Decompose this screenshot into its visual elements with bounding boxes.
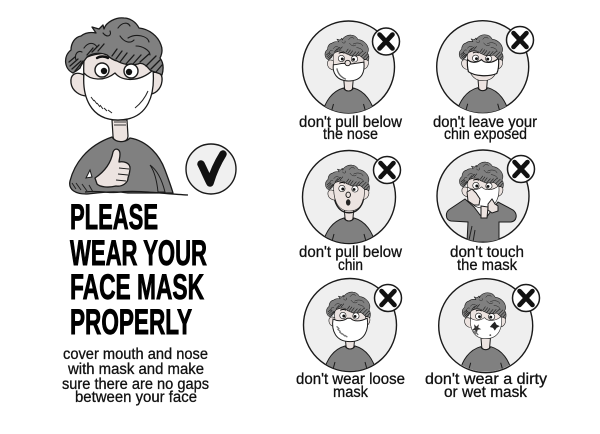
- caption: don't pull below: [299, 114, 403, 131]
- text block: instructions: with mask and make: [67, 361, 204, 378]
- panel: don't touch the mask: [437, 150, 534, 274]
- caption: [450, 244, 524, 274]
- heading: please wear your face mask properly: [70, 198, 207, 342]
- icon: x badge: [374, 284, 402, 312]
- text block: instructions: [62, 346, 209, 406]
- hands touching the mask: [467, 189, 498, 218]
- heading: please wear your face mask properly: WEAR YOUR: [70, 234, 207, 273]
- heading: please wear your face mask properly: FACE MASK: [70, 268, 204, 307]
- caption: don't wear loose: [296, 371, 405, 388]
- caption: [299, 114, 403, 143]
- heading: please wear your face mask properly: PLEASE: [70, 198, 158, 237]
- caption: [433, 114, 537, 143]
- icon: check mark badge: [186, 144, 236, 194]
- panel: don't wear a dirty or wet mask: [425, 279, 547, 401]
- panel: don't leave your chin exposed: [433, 21, 537, 143]
- heading: please wear your face mask properly: PROPERLY: [70, 303, 192, 342]
- caption: don't leave your: [433, 114, 537, 131]
- text block: instructions: sure there are no gaps: [62, 376, 209, 393]
- caption: the mask: [457, 257, 517, 274]
- panel: don't pull below the nose: [299, 21, 403, 143]
- illustration: boy wearing mask correctly with thumbs up: [66, 18, 188, 195]
- caption: mask: [333, 384, 368, 401]
- caption: [296, 371, 405, 401]
- icon: x badge: [372, 28, 400, 55]
- caption: [299, 244, 403, 274]
- icon: x badge: [512, 284, 540, 312]
- caption: [425, 371, 547, 401]
- caption: chin exposed: [444, 126, 527, 143]
- text block: instructions: between your face: [75, 389, 197, 406]
- caption: don't wear a dirty: [425, 371, 547, 388]
- caption: chin: [338, 257, 363, 274]
- icon: x badge: [508, 156, 534, 182]
- panel: don't pull below chin: [299, 150, 403, 274]
- caption: don't touch: [450, 244, 524, 261]
- caption: the nose: [323, 126, 378, 143]
- caption: or wet mask: [444, 384, 527, 401]
- text block: instructions: cover mouth and nose: [63, 346, 208, 363]
- icon: x badge: [506, 26, 534, 54]
- icon: x badge: [374, 156, 400, 184]
- caption: don't pull below: [299, 244, 403, 261]
- panel: don't wear loose mask: [296, 278, 405, 401]
